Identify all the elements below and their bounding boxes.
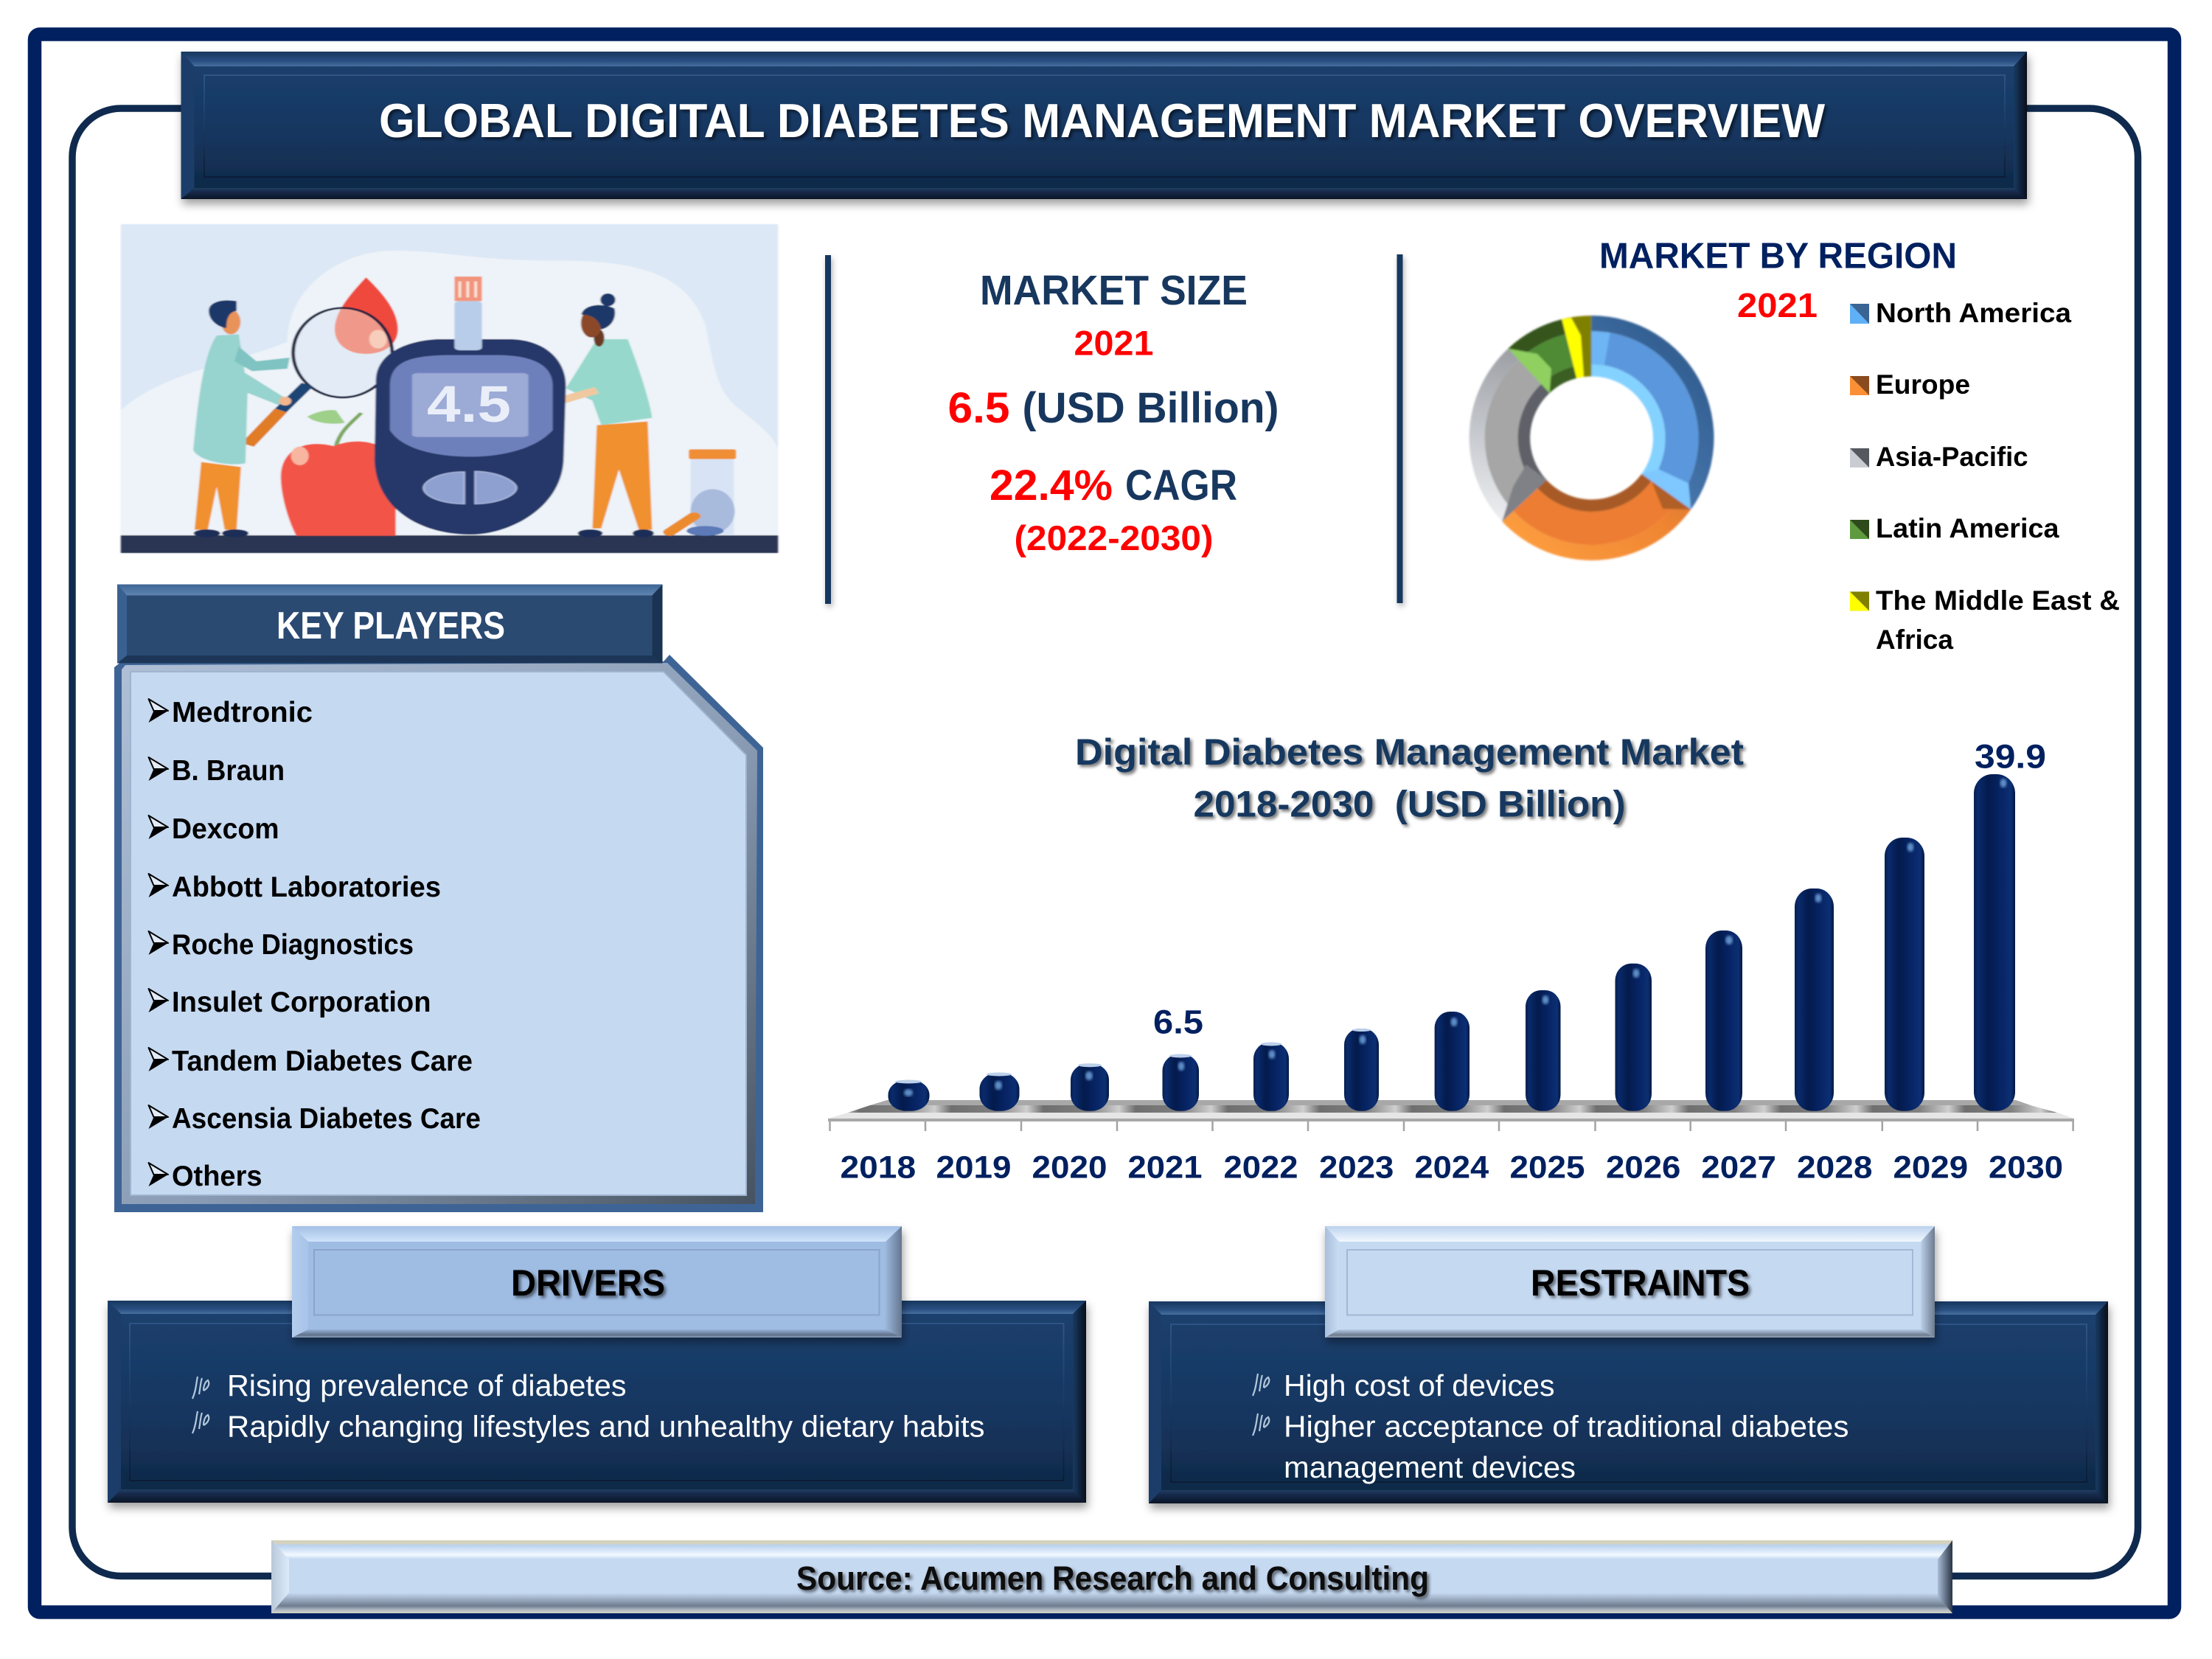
segment: Latin America bbox=[1508, 319, 1576, 393]
player: Abbott Laboratories: Abbott Laboratories bbox=[172, 872, 441, 903]
player: Dexcom: Dexcom bbox=[172, 813, 279, 845]
legend: Latin America: Latin America bbox=[1876, 513, 2059, 543]
bar 2027 bbox=[1705, 931, 1742, 1111]
bar 2020 bbox=[1071, 1063, 1109, 1111]
legend: North America: North America bbox=[1876, 298, 2071, 328]
market size value: 6.5 bbox=[948, 384, 1010, 432]
legend bbox=[1850, 298, 2120, 655]
apple bbox=[281, 442, 396, 536]
magnifier bbox=[293, 308, 392, 397]
player: Others: Others bbox=[172, 1161, 262, 1192]
segment: Europe bbox=[1502, 474, 1691, 560]
CAGR period: (2022-2030) bbox=[1015, 518, 1214, 557]
x axis year labels: 2026 bbox=[1606, 1150, 1680, 1186]
x axis year labels: 2019 bbox=[936, 1150, 1012, 1186]
panel: restraints bbox=[1149, 1226, 2108, 1503]
glucose meter body bbox=[375, 339, 566, 535]
restraint item 2: Higher acceptance of traditional diabetes bbox=[1284, 1410, 1849, 1444]
bar 2029 bbox=[1885, 838, 1924, 1111]
left person bbox=[195, 462, 241, 529]
restraints body bbox=[1149, 1301, 2108, 1503]
player: Tandem Diabetes Care: Tandem Diabetes Care bbox=[172, 1046, 473, 1077]
x axis year labels: 2030 bbox=[1989, 1150, 2063, 1186]
region heading: MARKET BY REGION bbox=[1599, 237, 1957, 276]
market size year: 2021 bbox=[1074, 324, 1153, 363]
bar 2028 bbox=[1795, 888, 1834, 1111]
panel body bbox=[114, 655, 763, 1212]
restraints heading: RESTRAINTS bbox=[1531, 1262, 1750, 1304]
market size block bbox=[948, 267, 1279, 557]
bar chart: market 2018-2030 bbox=[828, 731, 2074, 1186]
x axis year labels: 2028 bbox=[1797, 1150, 1873, 1186]
bar 2025 bbox=[1526, 990, 1560, 1111]
source bar bbox=[271, 1540, 1952, 1613]
chart title: Digital Diabetes Management Market bbox=[1075, 731, 1744, 773]
vertical divider right bbox=[1397, 254, 1402, 603]
market size heading: MARKET SIZE bbox=[980, 267, 1248, 314]
illustration: glucose meter with doctors bbox=[121, 224, 778, 553]
x axis year labels: 2018 bbox=[841, 1150, 916, 1186]
bar 2023 bbox=[1344, 1029, 1379, 1111]
value label 2021: 6.5 bbox=[1153, 1004, 1203, 1041]
jar and pills bbox=[691, 459, 734, 535]
legend: Middle East and Africa: Africa bbox=[1876, 625, 1953, 655]
x axis year labels bbox=[841, 1150, 2063, 1186]
donut chart bbox=[1470, 316, 1714, 560]
panel: drivers bbox=[108, 1226, 1086, 1503]
x axis year labels: 2025 bbox=[1510, 1150, 1585, 1186]
driver item 2: Rapidly changing lifestyles and unhealthy dietary habits bbox=[227, 1410, 985, 1444]
player: Roche Diagnostics: Roche Diagnostics bbox=[172, 929, 414, 961]
key players header bbox=[117, 585, 662, 663]
apple leaf and stem bbox=[307, 410, 345, 424]
bar 2022 bbox=[1253, 1043, 1289, 1111]
test strip bbox=[454, 301, 482, 350]
segment: North America bbox=[1591, 316, 1714, 509]
chart title bbox=[1075, 731, 1744, 825]
bar 2026 bbox=[1615, 964, 1652, 1111]
right person bbox=[592, 422, 652, 529]
legend: Asia-Pacific: Asia-Pacific bbox=[1876, 442, 2028, 472]
drivers heading: DRIVERS bbox=[511, 1262, 665, 1304]
drivers tab bbox=[292, 1226, 902, 1338]
key players header: KEY PLAYERS bbox=[276, 605, 505, 647]
x axis year labels: 2029 bbox=[1893, 1150, 1968, 1186]
title text: GLOBAL DIGITAL DIABETES MANAGEMENT MARKET OVERVIEW bbox=[379, 94, 1826, 147]
region year: 2021 bbox=[1737, 286, 1818, 324]
x axis year labels: 2027 bbox=[1701, 1150, 1776, 1186]
bar 2030 bbox=[1974, 774, 2015, 1111]
CAGR label: CAGR bbox=[1125, 462, 1237, 509]
legend: Europe: Europe bbox=[1876, 369, 1970, 400]
restraints tab bbox=[1325, 1226, 1935, 1338]
segment: Asia-Pacific bbox=[1470, 349, 1550, 521]
market by region block bbox=[1470, 237, 2120, 655]
player: Insulet Corporation: Insulet Corporation bbox=[172, 987, 431, 1018]
x axis year labels: 2023 bbox=[1319, 1150, 1394, 1186]
bar 2019 bbox=[979, 1072, 1019, 1111]
key players panel bbox=[114, 585, 763, 1212]
value label 2030: 39.9 bbox=[1975, 737, 2046, 776]
player: Ascensia Diabetes Care: Ascensia Diabetes Care bbox=[172, 1103, 481, 1135]
legend: Middle East and Africa: The Middle East & bbox=[1876, 585, 2120, 616]
restraint item 2 bbox=[1253, 1410, 1849, 1484]
player: B. Braun: B. Braun bbox=[172, 755, 285, 787]
bars bbox=[888, 774, 2015, 1111]
drivers body bbox=[108, 1301, 1086, 1503]
player: Medtronic: Medtronic bbox=[172, 697, 313, 728]
CAGR value: 22.4% bbox=[990, 462, 1113, 509]
segment: Middle East and Africa bbox=[1562, 316, 1591, 378]
x axis year labels: 2024 bbox=[1414, 1150, 1489, 1186]
restraint item 1: High cost of devices bbox=[1284, 1368, 1554, 1402]
source text: Source: Acumen Research and Consulting bbox=[796, 1559, 1429, 1597]
legend: Middle East and Africa bbox=[1850, 585, 2120, 655]
bar 2021 bbox=[1162, 1054, 1199, 1111]
x axis year labels: 2022 bbox=[1224, 1150, 1298, 1186]
driver item 1: Rising prevalence of diabetes bbox=[227, 1368, 627, 1402]
vertical divider left bbox=[825, 255, 831, 604]
restraint item 2: management devices bbox=[1284, 1450, 1576, 1484]
x axis year labels: 2021 bbox=[1128, 1150, 1202, 1186]
title banner bbox=[181, 52, 2027, 199]
x axis year labels: 2020 bbox=[1032, 1150, 1107, 1186]
chart title: 2018-2030 (USD Billion) bbox=[1193, 784, 1625, 825]
meter reading: 4.5 bbox=[427, 375, 511, 433]
bar 2018 bbox=[888, 1079, 929, 1111]
bar 2024 bbox=[1435, 1012, 1470, 1111]
market size unit: (USD Billion) bbox=[1022, 384, 1279, 432]
chart floor and axis bbox=[828, 1100, 2074, 1131]
blood drop bbox=[335, 277, 398, 354]
